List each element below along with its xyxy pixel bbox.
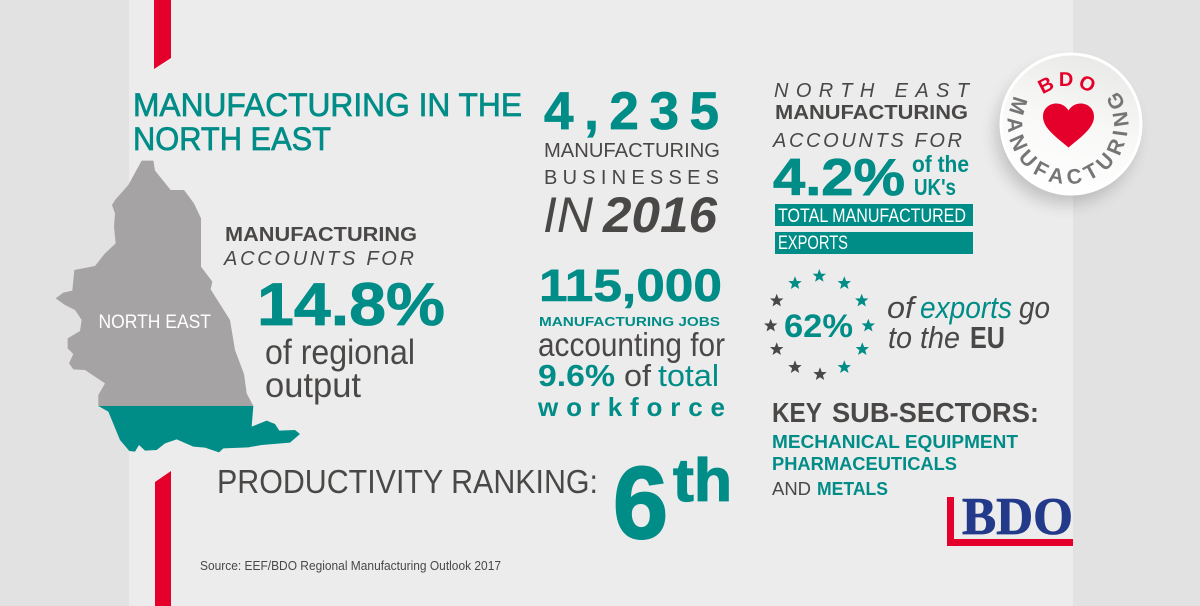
title: MANUFACTURING IN THE <box>133 87 522 123</box>
badge text: BDO: BDO <box>1037 72 1094 94</box>
icon: heart <box>1043 104 1094 148</box>
stat: manufacturing businesses: 2016 <box>602 187 718 243</box>
stat: productivity ranking <box>217 446 732 560</box>
stat: manufacturing businesses <box>543 82 720 243</box>
stat: exports to the EU: EU <box>970 320 1005 355</box>
stat: productivity ranking: 6 <box>613 446 668 560</box>
central panel <box>129 0 1073 606</box>
stat: manufacturing jobs: 115,000 <box>539 260 722 311</box>
EU star ring <box>764 269 875 380</box>
stat: UK exports share: TOTAL MANUFACTURED <box>778 206 966 227</box>
stat: exports to the EU <box>784 290 1050 355</box>
stat: regional output: 14.8% <box>257 271 445 338</box>
stat: exports to the EU: of <box>887 290 918 325</box>
stat: regional output <box>223 224 445 405</box>
key sub-sectors: SUB-SECTORS: <box>832 397 1039 428</box>
badge: BDO loves manufacturing <box>990 52 1142 210</box>
key sub-sectors: PHARMACEUTICALS <box>772 454 957 474</box>
stat: UK exports share: ACCOUNTS FOR <box>772 130 962 152</box>
stat: regional output: of regional <box>265 333 415 372</box>
stat: UK exports share <box>772 80 973 254</box>
map label: NORTH EAST <box>98 312 211 333</box>
map upper grey area <box>56 161 253 406</box>
BDO logo: BDO <box>962 488 1073 546</box>
stat: manufacturing jobs <box>537 260 725 422</box>
stat: manufacturing jobs: MANUFACTURING JOBS <box>539 314 720 329</box>
stat: manufacturing jobs: workforce <box>537 392 725 422</box>
key sub-sectors: KEY <box>772 397 822 428</box>
red ribbon bottom <box>155 471 171 606</box>
stat: exports to the EU: to the <box>888 320 960 355</box>
stat: manufacturing jobs: total <box>658 358 719 393</box>
source note: Source: EEF/BDO Regional Manufacturing Outlook 2017 <box>200 559 501 573</box>
stat: exports to the EU: exports <box>920 290 1012 325</box>
stat: UK exports share: NORTH EAST <box>774 80 971 102</box>
key sub-sectors: METALS <box>817 479 888 499</box>
key sub-sectors <box>772 397 1039 499</box>
stat: manufacturing businesses: 4,235 <box>544 82 719 141</box>
stat: productivity ranking: th <box>673 447 732 514</box>
map: North East region <box>56 161 300 452</box>
key sub-sectors: MECHANICAL EQUIPMENT <box>772 432 1018 452</box>
stat: exports to the EU: 62% <box>784 308 853 344</box>
title: NORTH EAST <box>133 121 331 157</box>
stat: exports to the EU: go <box>1019 290 1050 325</box>
stat: UK exports share: MANUFACTURING <box>775 101 968 124</box>
stat: UK exports share: UK's <box>914 174 956 200</box>
stat: regional output: ACCOUNTS FOR <box>223 248 414 270</box>
stat: UK exports share: 4.2% <box>773 149 905 207</box>
badge text: manufacturing: MANUFACTURING <box>1007 92 1129 184</box>
teal band: total manufactured <box>775 204 973 226</box>
stat: manufacturing jobs: 9.6% <box>538 358 615 393</box>
stat: regional output: output <box>265 366 361 405</box>
map lower teal share <box>98 406 300 452</box>
stat: manufacturing jobs: of <box>624 358 651 393</box>
stat: manufacturing businesses: MANUFACTURING <box>544 140 720 162</box>
stat: manufacturing businesses: IN <box>543 187 594 243</box>
red ribbon top <box>154 0 171 69</box>
key sub-sectors: AND <box>772 479 811 499</box>
stat: regional output: MANUFACTURING <box>225 224 417 246</box>
stat: UK exports share: EXPORTS <box>778 233 848 254</box>
stat: manufacturing businesses: BUSINESSES <box>544 167 719 189</box>
title <box>133 87 522 157</box>
stat: manufacturing jobs: accounting for <box>538 326 725 363</box>
stat: UK exports share: of the <box>912 151 969 177</box>
teal band: exports <box>775 232 973 254</box>
stat: productivity ranking: PRODUCTIVITY RANKING: <box>217 463 598 500</box>
